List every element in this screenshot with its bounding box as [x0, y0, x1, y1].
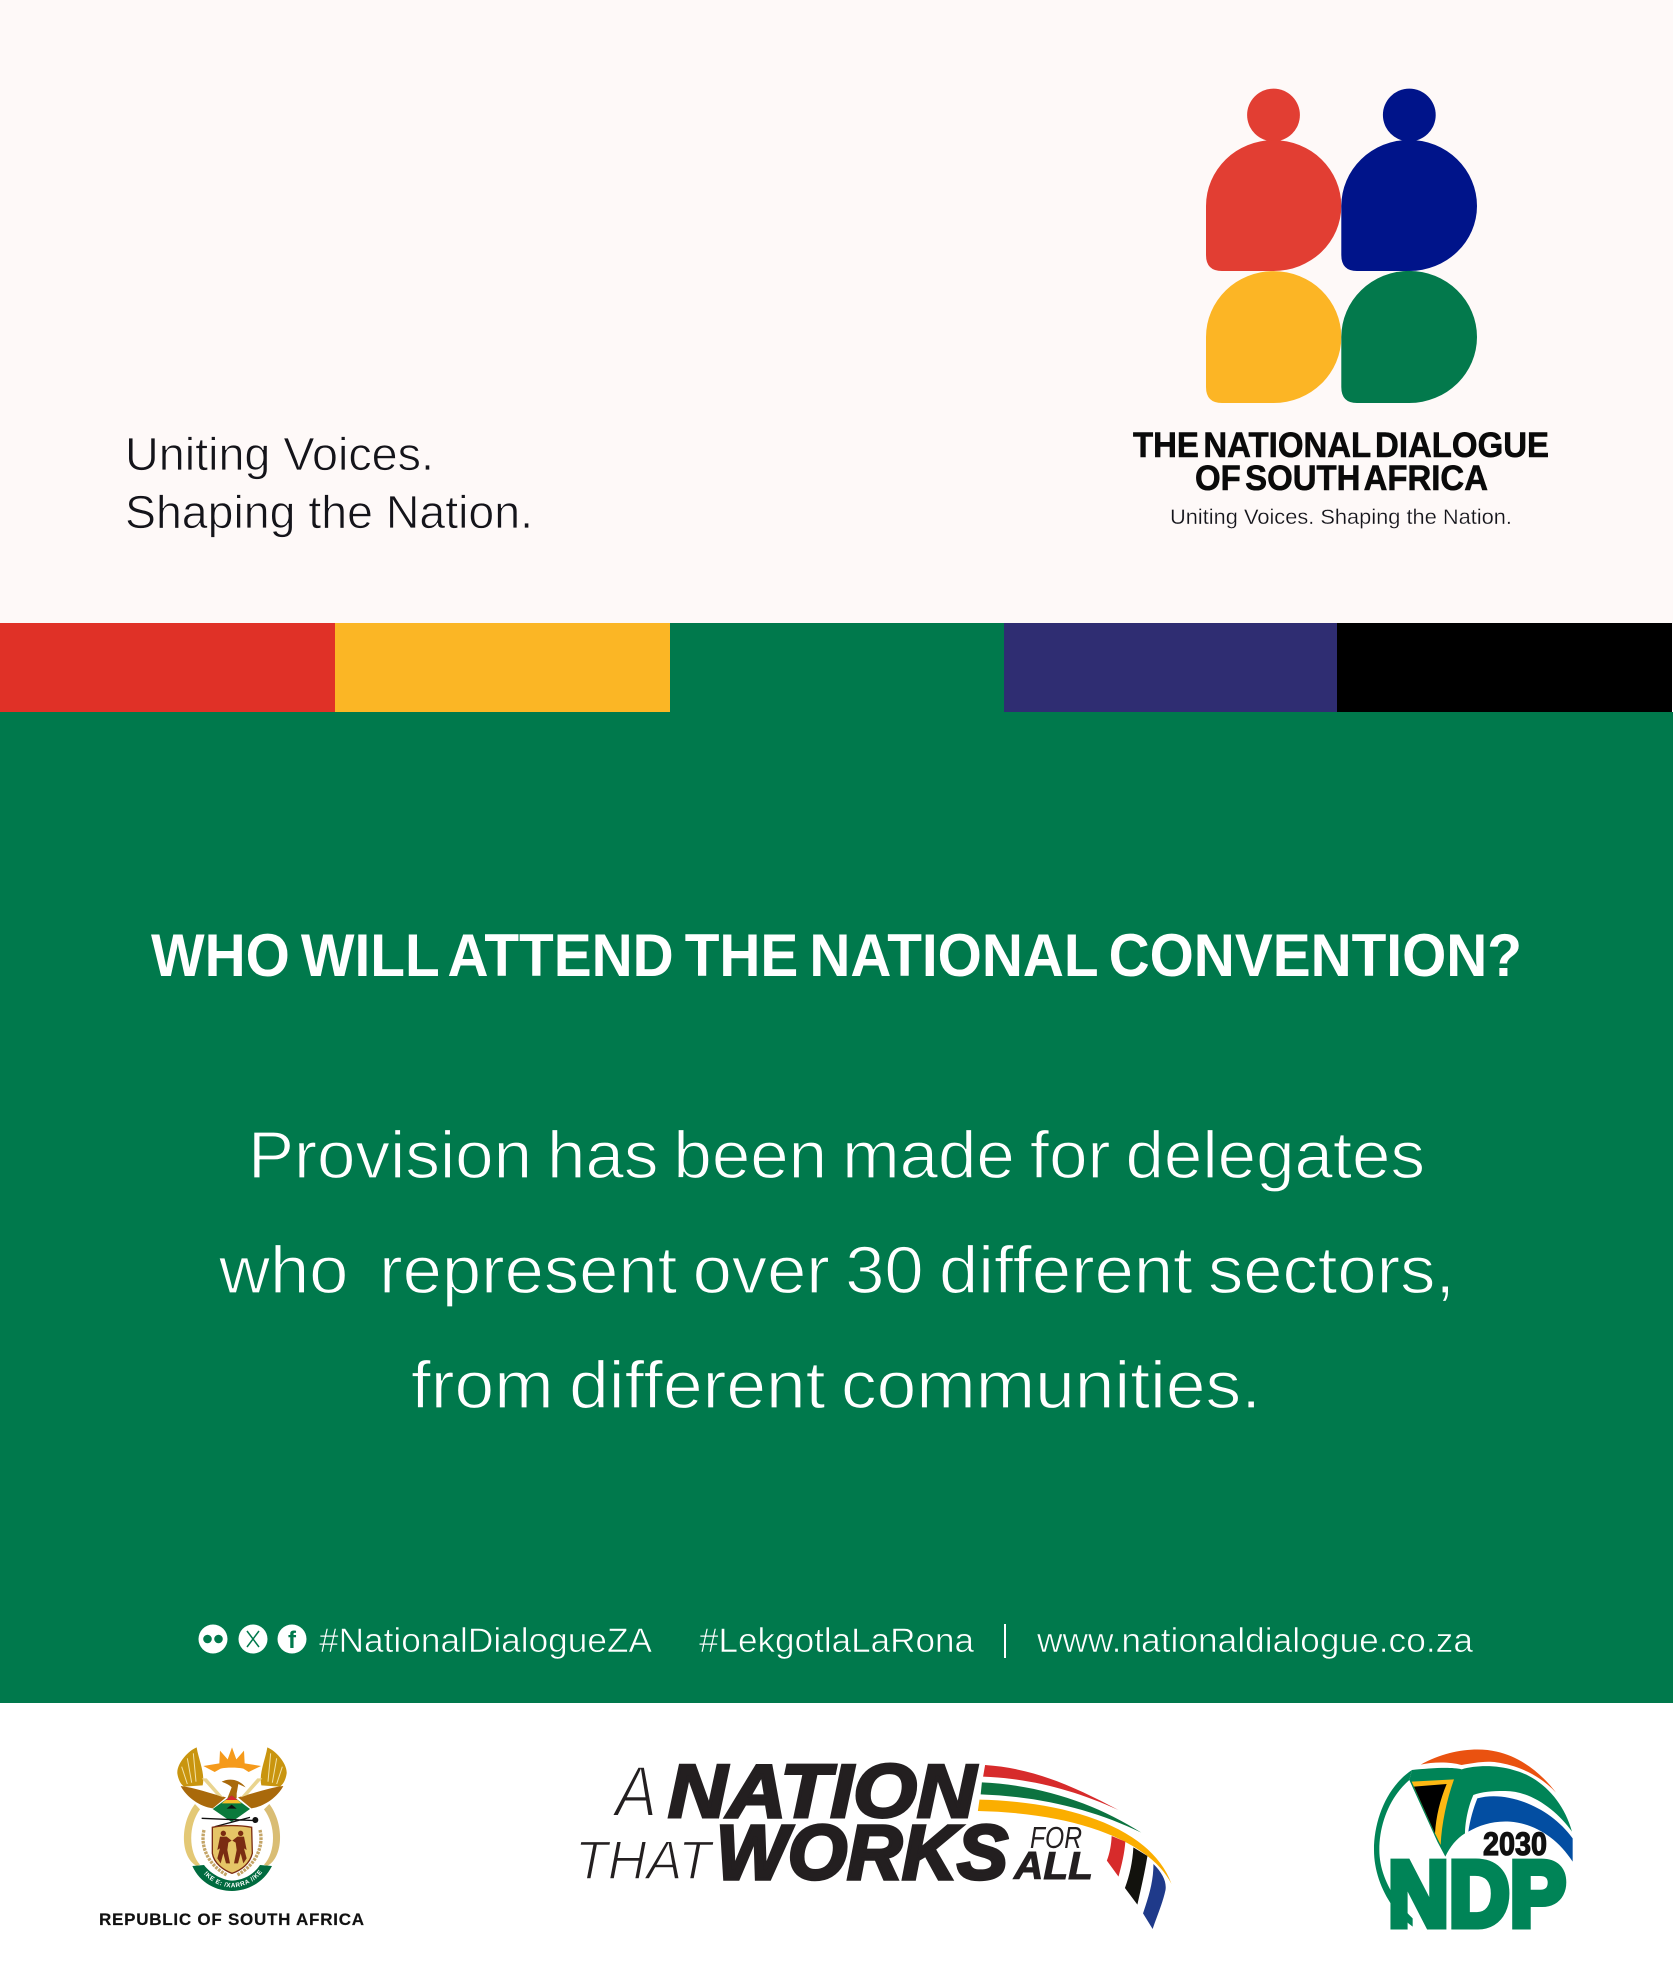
- icon: navy person: [1341, 89, 1477, 271]
- logo wordmark: THE NATIONAL DIALOGUE: [1133, 426, 1549, 465]
- logo: NDP 2030: [1374, 1749, 1573, 1946]
- icon: flickr: [198, 1624, 228, 1654]
- icon: protea diamond: [213, 1795, 250, 1822]
- year label: 2030: [1483, 1826, 1547, 1862]
- icon: wheat: [203, 1830, 261, 1875]
- icon: rising sun: [203, 1747, 261, 1772]
- wordmark: ALL: [1013, 1845, 1093, 1888]
- colour band: [0, 623, 1672, 712]
- icon: green shape: [1341, 271, 1477, 403]
- swoosh stripes: [978, 1765, 1172, 1929]
- icon: red person: [1206, 89, 1341, 271]
- panel: partner logos: [99, 1747, 1573, 1946]
- wordmark: [575, 1749, 1093, 1896]
- icon: X: [238, 1624, 268, 1654]
- body text: [218, 1118, 1455, 1423]
- tagline left: [125, 428, 533, 538]
- icon: orange arc: [1421, 1749, 1556, 1793]
- heading: WHO WILL ATTEND THE NATIONAL CONVENTION?: [151, 922, 1522, 989]
- icon: motto ribbon: !KE E: /XARRA //KE: [204, 1870, 262, 1888]
- footer hashtags and website: #NationalDialogueZA: [319, 1622, 652, 1660]
- logo: National Dialogue: [1133, 89, 1549, 529]
- icon: yellow chevron: [1412, 1779, 1454, 1845]
- icon: black triangle: [1414, 1784, 1447, 1833]
- icon: green ring: [1374, 1770, 1413, 1927]
- logo: A Nation That Works For All: [575, 1749, 1172, 1929]
- footer hashtags and website: #LekgotlaLaRona: [699, 1622, 974, 1660]
- logo caption: REPUBLIC OF SOUTH AFRICA: [99, 1910, 364, 1929]
- body text: Provision has been made for delegates: [248, 1118, 1425, 1193]
- logo wordmark: OF SOUTH AFRICA: [1195, 459, 1488, 498]
- logo wordmark: [1133, 426, 1549, 498]
- panel: green message: [0, 712, 1673, 1703]
- icon: green flag: [1409, 1766, 1572, 1857]
- icon: tusks: [184, 1804, 280, 1866]
- icon: spear and knobkerrie: [202, 1817, 258, 1827]
- body text: who represent over 30 different sectors,: [218, 1233, 1455, 1308]
- footer hashtags and website: www.nationaldialogue.co.za: [1036, 1622, 1473, 1660]
- icon: blue band: [1468, 1796, 1573, 1862]
- logo tagline: Uniting Voices. Shaping the Nation.: [1170, 506, 1512, 529]
- icon: human figures: [217, 1831, 247, 1863]
- footer hashtags and website: [319, 1622, 1473, 1660]
- panel: header: [0, 0, 1673, 623]
- icon: right wing: [238, 1747, 287, 1808]
- tagline left: Shaping the Nation.: [125, 486, 533, 538]
- icon: motto ribbon: [192, 1865, 272, 1891]
- icon: facebook: f: [288, 1627, 297, 1654]
- icon: shield: [212, 1826, 252, 1873]
- icon: yellow shape: [1206, 271, 1341, 403]
- wordmark: THAT: [575, 1829, 714, 1891]
- body text: from different communities.: [411, 1348, 1261, 1423]
- wordmark: FOR: [1030, 1820, 1082, 1855]
- icon: left wing: [177, 1747, 226, 1808]
- wordmark: NATION: [668, 1749, 978, 1833]
- tagline left: Uniting Voices.: [125, 428, 434, 480]
- icon: secretary bird head: [222, 1780, 246, 1798]
- NDP letters: NDP: [1388, 1842, 1566, 1946]
- wordmark: A: [611, 1753, 657, 1832]
- wordmark: WORKS: [716, 1810, 1008, 1896]
- social icons: [198, 1624, 306, 1654]
- logo: coat of arms: [99, 1747, 364, 1929]
